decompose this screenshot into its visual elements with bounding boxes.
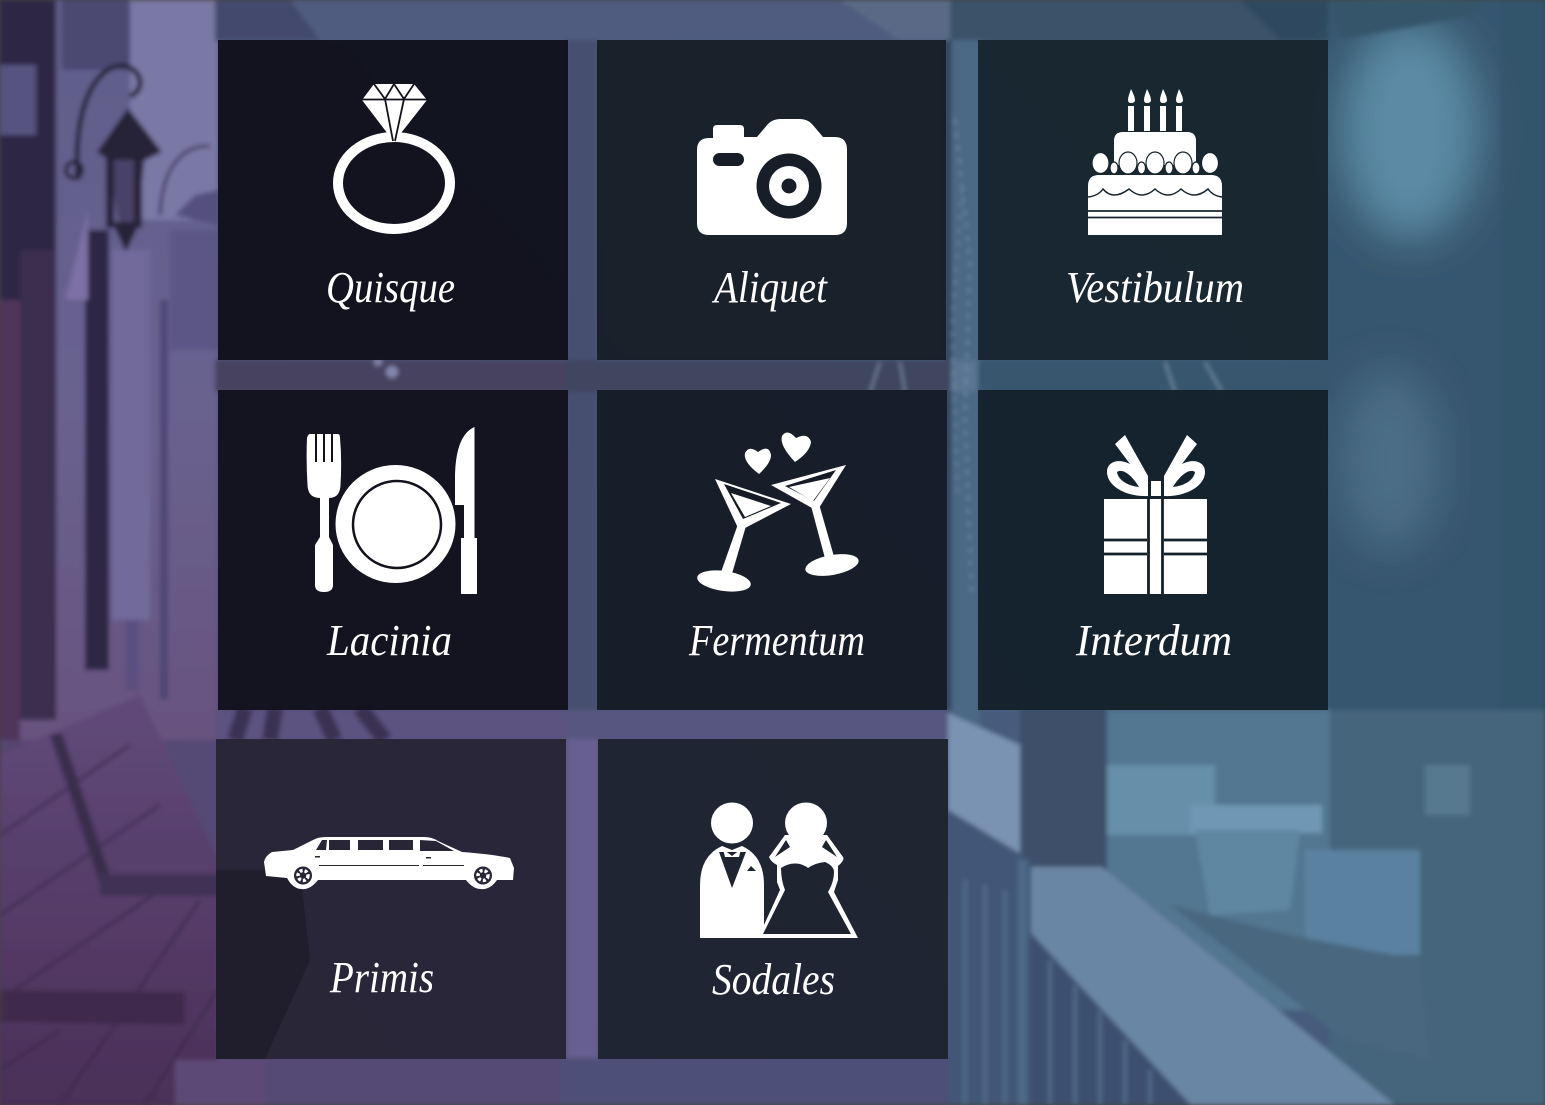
label: Interdum: Interdum [1075,616,1232,665]
panel: Vestibulum [978,40,1328,360]
porch post [1020,708,1107,870]
label: Sodales: Sodales [712,955,835,1004]
wall lantern [66,66,218,252]
icon: limousine [264,837,514,889]
icon: bride and groom [700,802,858,938]
panel: Primis [216,739,566,1059]
centre columns [170,40,1330,1105]
benches and deck [0,695,265,1105]
label: Vestibulum: Vestibulum [1066,263,1244,312]
bow right [1164,435,1205,496]
tree foliage on the right [1328,0,1545,720]
icon: diamond ring [338,84,450,229]
panel: Quisque [218,40,568,360]
icon: gift box with bow [1104,435,1207,594]
panel: Aliquet [597,40,946,360]
bow left [1107,435,1148,496]
icon: camera [697,119,847,235]
panel: Sodales [598,739,948,1059]
panel: Fermentum [597,390,947,710]
shadow of bench across panel [216,870,310,1059]
label: Quisque: Quisque [326,263,455,312]
label: Lacinia: Lacinia [326,616,452,665]
fern highlights [870,120,1222,600]
steps and garden [1100,710,1545,1105]
label: Fermentum: Fermentum [688,616,865,665]
icon: birthday cake [1088,89,1222,235]
panel: Interdum [978,390,1328,710]
bokeh light dots [374,358,398,378]
panel: Lacinia [218,390,568,710]
label: Primis: Primis [329,953,434,1002]
icon: clinking martini glasses [696,432,860,595]
icon: plate with fork and knife [307,427,477,594]
label: Aliquet: Aliquet [711,263,829,312]
porch wall [0,0,218,740]
ceiling [215,0,1350,42]
porch railing [948,700,1395,1105]
